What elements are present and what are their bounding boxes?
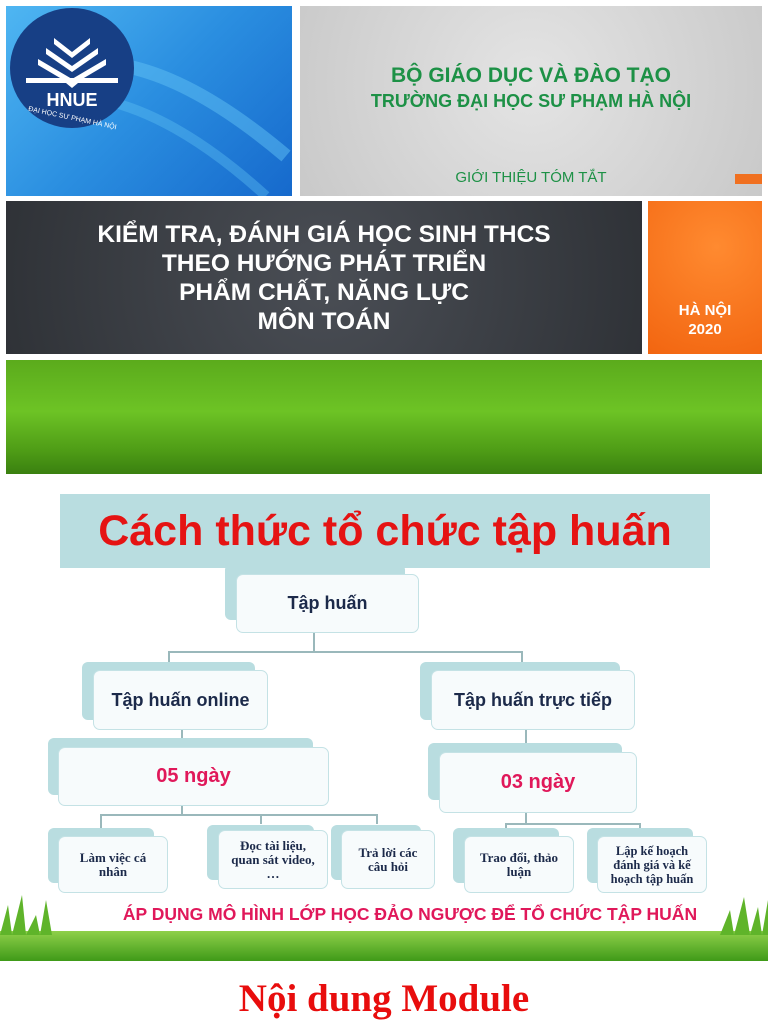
- heading: ministry: TRƯỜNG ĐẠI HỌC SƯ PHẠM HÀ NỘI: [371, 91, 691, 111]
- leaf: trả lời: Trả lời các: [359, 844, 417, 860]
- leaf: trao đổi: Trao đổi, thảo: [480, 850, 558, 864]
- leaf: trả lời: câu hỏi: [368, 858, 408, 874]
- panel: header gray: [300, 6, 762, 196]
- panel: date orange: [648, 201, 762, 354]
- icon: HNUE logo: HNUE: [46, 90, 98, 110]
- leaf: đọc tài liệu: …: [266, 866, 279, 880]
- text: Hà Nội 2020: [679, 302, 731, 338]
- node: 05 ngày: [48, 738, 329, 806]
- icon: HNUE logo: [10, 8, 290, 196]
- panel: title dark: [6, 201, 642, 354]
- leaf: trả lời: [331, 825, 435, 889]
- leaf: làm việc cá nhân: Làm việc cá: [80, 850, 146, 864]
- text: subtitle: GIỚI THIỆU TÓM TẮT: [455, 169, 607, 186]
- leaf: đọc tài liệu: quan sát video,: [231, 852, 315, 866]
- node: online: Tập huấn online: [112, 690, 250, 710]
- heading: ministry: [371, 62, 691, 111]
- icon: HNUE logo: ĐẠI HỌC SƯ PHẠM HÀ NỘI: [28, 104, 118, 131]
- node: 05 ngày: 05 ngày: [156, 765, 231, 787]
- panel: title dark: THEO HƯỚNG PHÁT TRIỂN: [162, 250, 486, 276]
- leaf: đọc tài liệu: Đọc tài liệu,: [240, 838, 306, 852]
- node: tập huấn: Tập huấn: [288, 593, 368, 613]
- title: cách thức: Cách thức tổ chức tập huấn: [98, 506, 672, 554]
- node: trực tiếp: Tập huấn trực tiếp: [454, 690, 612, 710]
- grass strip: [0, 895, 768, 961]
- node: online: [82, 662, 268, 730]
- leaf: trao đổi: [453, 828, 574, 893]
- panel: title dark: MÔN TOÁN: [258, 308, 390, 334]
- leaf: làm việc cá nhân: nhân: [99, 864, 127, 878]
- leaf: trao đổi: luận: [507, 864, 531, 878]
- panel: title dark: KIỂM TRA, ĐÁNH GIÁ HỌC SINH THCS: [97, 220, 551, 248]
- tree diagram: [100, 633, 641, 828]
- panel: grass: [6, 360, 762, 474]
- leaf: lập kế hoạch: [587, 828, 707, 893]
- leaf: lập kế hoạch: Lập kế hoạch: [616, 844, 688, 858]
- node: 03 ngày: 03 ngày: [501, 771, 575, 793]
- heading: ministry: BỘ GIÁO DỤC VÀ ĐÀO TẠO: [391, 64, 671, 87]
- node: 03 ngày: [428, 743, 637, 813]
- node: trực tiếp: [420, 662, 635, 730]
- panel: logo: [6, 6, 292, 196]
- callout: flipped classroom: ÁP DỤNG MÔ HÌNH LỚP HỌC ĐẢO NGƯỢC ĐỂ TỔ CHỨC TẬP HUẤN: [123, 904, 697, 924]
- leaf: lập kế hoạch: hoạch tập huấn: [611, 872, 693, 886]
- heading: nội dung module: Nội dung Module: [239, 977, 529, 1020]
- leaf: đọc tài liệu: [207, 825, 328, 889]
- leaf: làm việc cá nhân: [48, 828, 168, 893]
- node: tập huấn: [225, 568, 419, 633]
- leaf: lập kế hoạch: đánh giá và kế: [613, 858, 691, 872]
- panel: title dark: PHẨM CHẤT, NĂNG LỰC: [179, 278, 469, 306]
- text: Hà Nội 2020: 2020: [688, 321, 722, 338]
- icon: orange marker: [735, 174, 762, 184]
- text: Hà Nội 2020: HÀ NỘI: [679, 302, 731, 319]
- title: cách thức: [60, 494, 710, 568]
